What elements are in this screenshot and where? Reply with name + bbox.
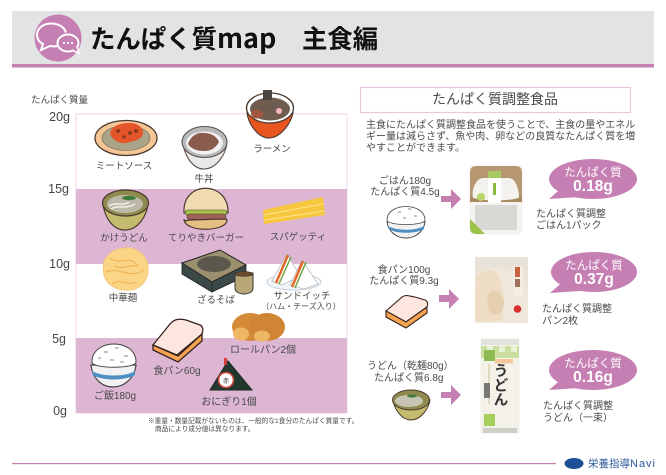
axis labels (48, 110, 70, 418)
product caption: うどん（一束） (543, 412, 613, 424)
axis labels: 20g (49, 110, 70, 124)
food: sandwich: サンドイッチ (273, 291, 331, 302)
food: roll bread: ロールパン2個 (230, 343, 296, 356)
food: chinese noodles: 中華麺 (109, 292, 138, 304)
food: teriyaki burger (168, 188, 244, 244)
product: udon pack: う (494, 363, 508, 380)
callout: 0.18g (549, 159, 637, 199)
product: rice pack (470, 166, 522, 234)
product: bread pack (475, 257, 528, 323)
icon: udon bowl (392, 390, 430, 420)
food: zaru soba (182, 250, 253, 306)
food: sandwich (261, 254, 341, 311)
food: bread 60g: 食パン60g (153, 365, 201, 377)
product caption: パン2枚 (542, 314, 578, 327)
callout: 0.18g: たんぱく質 (564, 165, 622, 179)
arrow (441, 385, 461, 405)
logo: 栄養指導Navi (564, 457, 656, 470)
arrow (439, 289, 459, 309)
rice label: ごはん180g (379, 176, 431, 187)
food: kake udon: かけうどん (100, 233, 148, 244)
food: spaghetti (263, 197, 326, 243)
food: zaru soba: ざるそば (197, 294, 235, 306)
intro text (366, 118, 635, 154)
product caption: たんぱく質調整 (536, 209, 606, 220)
axis labels: 5g (52, 332, 66, 346)
rice label: たんぱく質4.5g (370, 185, 440, 198)
axis labels: 0g (53, 404, 67, 418)
footnote (148, 416, 358, 433)
product caption: たんぱく質調整 (543, 401, 613, 412)
udon label: うどん（乾麺80g） (367, 361, 454, 372)
food: onigiri: おにぎり1個 (201, 395, 257, 408)
food: ramen: ラーメン (253, 144, 291, 155)
callout: 0.37g: 0.37g (574, 271, 614, 288)
intro text: 主食にたんぱく質調整食品を使うことで、主食の量やエネル (366, 118, 635, 131)
icon: chat bubbles (34, 14, 82, 62)
food: roll bread (230, 313, 296, 356)
header band (12, 11, 654, 68)
bread label: 食パン100g (378, 265, 430, 276)
callout: 0.37g: たんぱく質 (565, 258, 623, 272)
row: udon (367, 339, 637, 433)
title: 主食編 (302, 26, 378, 54)
row: rice (370, 159, 637, 238)
food: meat sauce (95, 120, 157, 172)
axis labels: 10g (49, 257, 70, 271)
food: gyudon (182, 126, 227, 185)
product: udon pack (481, 339, 519, 433)
intro text: やすことができます。 (366, 141, 465, 154)
axis labels: 15g (48, 182, 69, 196)
product: udon pack: ど (494, 378, 509, 394)
footnote: 商品により成分値は異なります。 (155, 424, 255, 433)
udon label: たんぱく質6.8g (374, 371, 443, 384)
callout: 0.16g: 0.16g (573, 369, 613, 386)
food: gyudon: 牛丼 (194, 173, 214, 185)
food: chinese noodles (103, 248, 148, 304)
arrow (441, 189, 461, 209)
panel heading: protein-adjusted foods (360, 88, 630, 112)
bread label: たんぱく質9.3g (369, 274, 439, 287)
footnote: ※重量・数量記載がないものは、一般的な1食分のたんぱく質量です。 (148, 416, 358, 425)
food: ramen (246, 90, 294, 155)
panel heading: protein-adjusted foods: たんぱく質調整食品 (432, 91, 558, 107)
food: onigiri: 赤 (223, 378, 229, 385)
food: onigiri (201, 358, 257, 408)
callout: 0.37g (550, 252, 637, 293)
callout: 0.16g (549, 350, 637, 390)
callout: 0.16g: たんぱく質 (564, 356, 622, 370)
callout: 0.18g: 0.18g (573, 178, 613, 195)
food: kake udon (100, 190, 148, 244)
product caption: たんぱく質調整 (542, 304, 612, 315)
food: sandwich: （ハム・チーズ入り） (261, 301, 341, 311)
food: rice bowl (91, 344, 136, 402)
axis title: たんぱく質量 (31, 94, 89, 106)
food: bread 60g (153, 319, 203, 377)
title: たんぱく質map (90, 17, 276, 56)
food: meat sauce: ミートソース (96, 161, 152, 172)
chart: protein map (31, 94, 347, 418)
product: udon pack: ん (494, 392, 508, 409)
food: spaghetti: スパゲッティ (270, 231, 326, 243)
footer line (12, 463, 556, 464)
food: teriyaki burger: てりやきバーガー (168, 233, 244, 244)
row: bread (369, 252, 637, 328)
logo: 栄養指導Navi: 栄養指導Navi (588, 457, 656, 470)
food: rice bowl: ご飯180g (94, 389, 136, 402)
product caption: ごはん1パック (536, 218, 602, 232)
icon: rice bowl (387, 206, 425, 238)
icon: bread slice (386, 295, 428, 328)
intro text: ギー量は減らさず、魚や肉、卵などの良質なたんぱく質を増 (366, 130, 635, 142)
